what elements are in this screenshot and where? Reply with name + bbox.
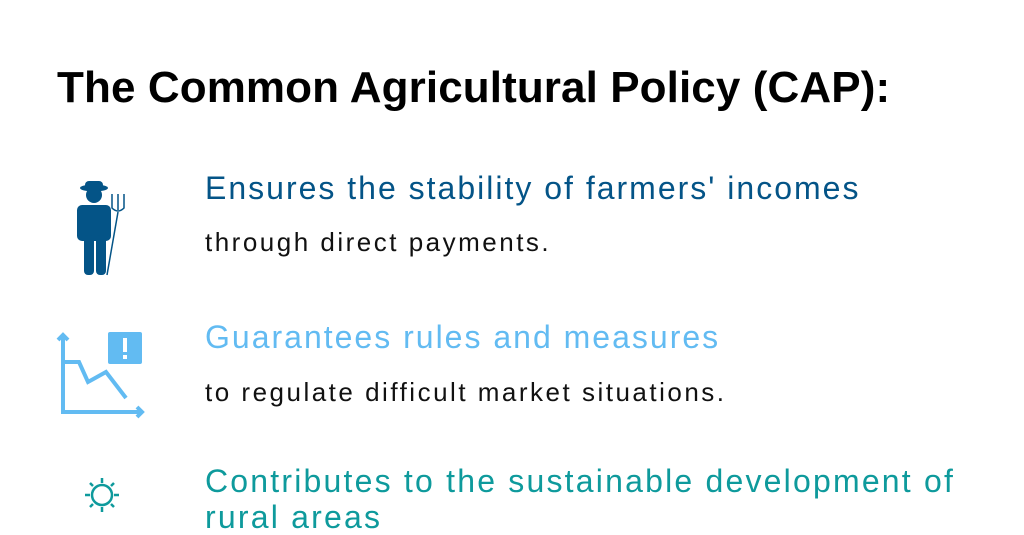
heading 2: Guarantees rules and measures (205, 319, 720, 355)
text 2: to regulate difficult market situations. (205, 377, 727, 407)
heading 3: Contributes to the sustainable development of (205, 463, 955, 499)
heading 3 (205, 463, 955, 535)
text 1: through direct payments. (205, 227, 551, 257)
title: The Common Agricultural Policy (CAP): (57, 63, 890, 112)
icon: farmer (77, 181, 125, 276)
icon: chart warning (56, 332, 145, 418)
heading 1: Ensures the stability of farmers' incomes (205, 170, 860, 206)
heading 3: rural areas (205, 499, 382, 535)
icon: sun (85, 478, 119, 512)
